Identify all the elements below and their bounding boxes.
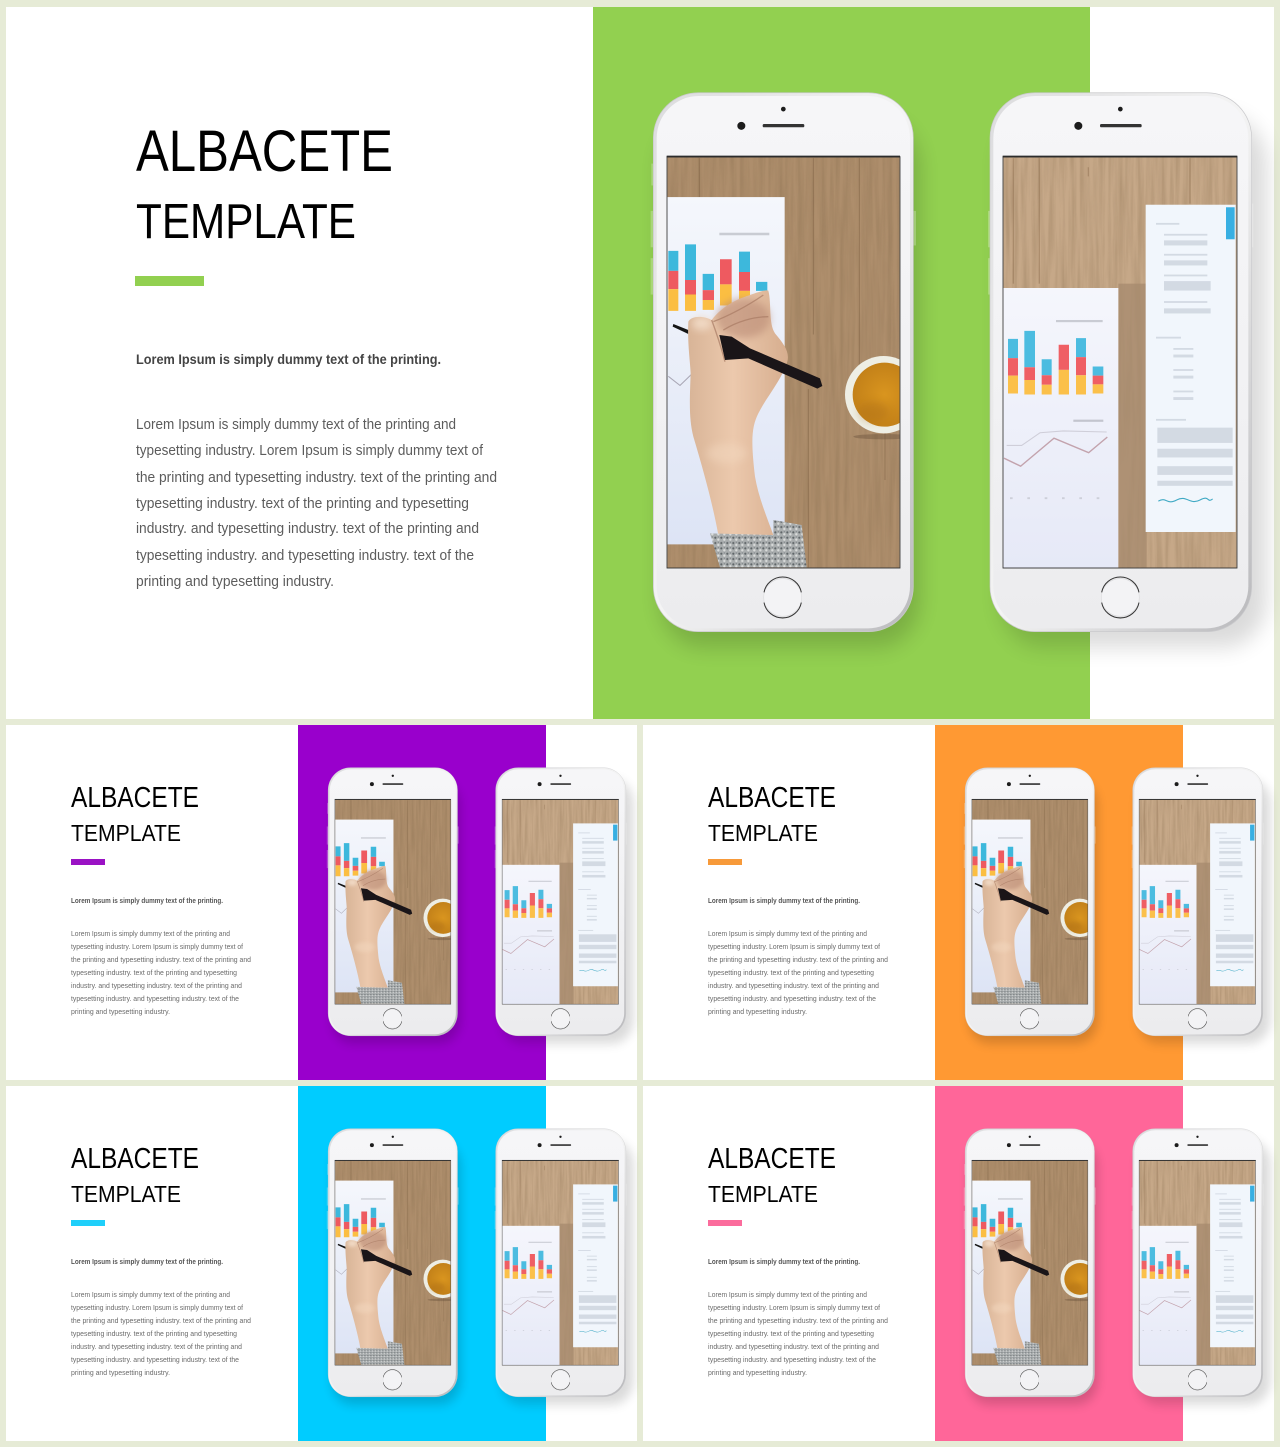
body text: the printing and typesetting industry. text of the printing and bbox=[708, 1316, 888, 1325]
accent bar bbox=[708, 859, 742, 865]
body text bbox=[71, 929, 251, 1016]
panel: white slide background bbox=[6, 725, 637, 1080]
lead sentence: Lorem Ipsum is simply dummy text of the printing. bbox=[71, 898, 223, 905]
body text: printing and typesetting industry. bbox=[136, 574, 334, 590]
body text: printing and typesetting industry. bbox=[708, 1368, 807, 1377]
body text: Lorem Ipsum is simply dummy text of the printing and bbox=[708, 929, 867, 938]
accent bar bbox=[71, 859, 105, 865]
body text: typesetting industry. text of the printing and typesetting bbox=[71, 968, 237, 977]
phones: hand and report photos bbox=[964, 768, 1270, 1044]
body text: printing and typesetting industry. bbox=[71, 1007, 170, 1016]
body text: industry. and typesetting industry. text of the printing and bbox=[136, 521, 479, 537]
body text: industry. and typesetting industry. text of the printing and bbox=[71, 1342, 242, 1351]
body text: typesetting industry. and typesetting industry. text of the bbox=[708, 1355, 876, 1364]
body text: industry. and typesetting industry. text of the printing and bbox=[71, 981, 242, 990]
body text: typesetting industry. Lorem Ipsum is simply dummy text of bbox=[708, 1303, 880, 1312]
title: ALBACETE bbox=[71, 782, 199, 814]
panel: green colour block bbox=[593, 7, 1090, 719]
body text: typesetting industry. text of the printing and typesetting bbox=[708, 1329, 874, 1338]
subtitle: TEMPLATE bbox=[136, 194, 356, 249]
subtitle: TEMPLATE bbox=[708, 1181, 818, 1207]
body text: typesetting industry. text of the printing and typesetting bbox=[71, 1329, 237, 1338]
panel: orange colour block bbox=[935, 725, 1183, 1080]
slide: cyan bbox=[6, 1086, 637, 1441]
panel: pink colour block bbox=[935, 1086, 1183, 1441]
panel: white slide background bbox=[643, 1086, 1274, 1441]
body text: the printing and typesetting industry. text of the printing and bbox=[71, 1316, 251, 1325]
accent bar bbox=[71, 1220, 105, 1226]
subtitle: TEMPLATE bbox=[708, 820, 818, 846]
body text: typesetting industry. text of the printing and typesetting bbox=[708, 968, 874, 977]
slide: orange bbox=[643, 725, 1274, 1080]
accent bar bbox=[135, 276, 204, 286]
body text: typesetting industry. and typesetting industry. text of the bbox=[708, 994, 876, 1003]
lead sentence: Lorem Ipsum is simply dummy text of the printing. bbox=[708, 1259, 860, 1266]
lead sentence: Lorem Ipsum is simply dummy text of the printing. bbox=[71, 1259, 223, 1266]
panel: white slide background bbox=[6, 1086, 637, 1441]
phones: hand and report photos bbox=[327, 1129, 633, 1405]
body text: typesetting industry. and typesetting industry. text of the bbox=[71, 1355, 239, 1364]
slide: green hero bbox=[6, 7, 1274, 719]
body text: typesetting industry. Lorem Ipsum is simply dummy text of bbox=[71, 1303, 243, 1312]
phones: hand and report photos bbox=[327, 768, 633, 1044]
body text: industry. and typesetting industry. text of the printing and bbox=[708, 981, 879, 990]
body text: typesetting industry. Lorem Ipsum is simply dummy text of bbox=[708, 942, 880, 951]
body text: typesetting industry. Lorem Ipsum is simply dummy text of bbox=[136, 443, 484, 459]
slide: pink bbox=[643, 1086, 1274, 1441]
body text: typesetting industry. Lorem Ipsum is simply dummy text of bbox=[71, 942, 243, 951]
subtitle: TEMPLATE bbox=[71, 1181, 181, 1207]
title: ALBACETE bbox=[136, 119, 393, 184]
body text: printing and typesetting industry. bbox=[708, 1007, 807, 1016]
body text: typesetting industry. and typesetting industry. text of the bbox=[136, 548, 474, 564]
body text: Lorem Ipsum is simply dummy text of the printing and bbox=[708, 1290, 867, 1299]
body text: typesetting industry. and typesetting industry. text of the bbox=[71, 994, 239, 1003]
body text: Lorem Ipsum is simply dummy text of the printing and bbox=[71, 929, 230, 938]
lead sentence: Lorem Ipsum is simply dummy text of the printing. bbox=[136, 351, 441, 367]
lead sentence: Lorem Ipsum is simply dummy text of the printing. bbox=[708, 898, 860, 905]
panel: purple colour block bbox=[298, 725, 546, 1080]
body text: the printing and typesetting industry. text of the printing and bbox=[708, 955, 888, 964]
body text: Lorem Ipsum is simply dummy text of the printing and bbox=[71, 1290, 230, 1299]
body text: printing and typesetting industry. bbox=[71, 1368, 170, 1377]
body text bbox=[708, 1290, 888, 1377]
accent bar bbox=[708, 1220, 742, 1226]
body text: industry. and typesetting industry. text of the printing and bbox=[708, 1342, 879, 1351]
phones: hand and report photos bbox=[964, 1129, 1270, 1405]
slide: purple bbox=[6, 725, 637, 1080]
body text: the printing and typesetting industry. text of the printing and bbox=[136, 470, 497, 486]
title: ALBACETE bbox=[708, 1143, 836, 1175]
body text bbox=[136, 417, 497, 590]
panel: white slide background bbox=[643, 725, 1274, 1080]
body text: the printing and typesetting industry. text of the printing and bbox=[71, 955, 251, 964]
body text bbox=[708, 929, 888, 1016]
body text: typesetting industry. text of the printing and typesetting bbox=[136, 496, 469, 512]
phones: hand and report photos bbox=[651, 93, 1267, 647]
panel: white slide background bbox=[6, 7, 1274, 719]
body text: Lorem Ipsum is simply dummy text of the printing and bbox=[136, 417, 456, 433]
title: ALBACETE bbox=[708, 782, 836, 814]
body text bbox=[71, 1290, 251, 1377]
title: ALBACETE bbox=[71, 1143, 199, 1175]
subtitle: TEMPLATE bbox=[71, 820, 181, 846]
panel: cyan colour block bbox=[298, 1086, 546, 1441]
